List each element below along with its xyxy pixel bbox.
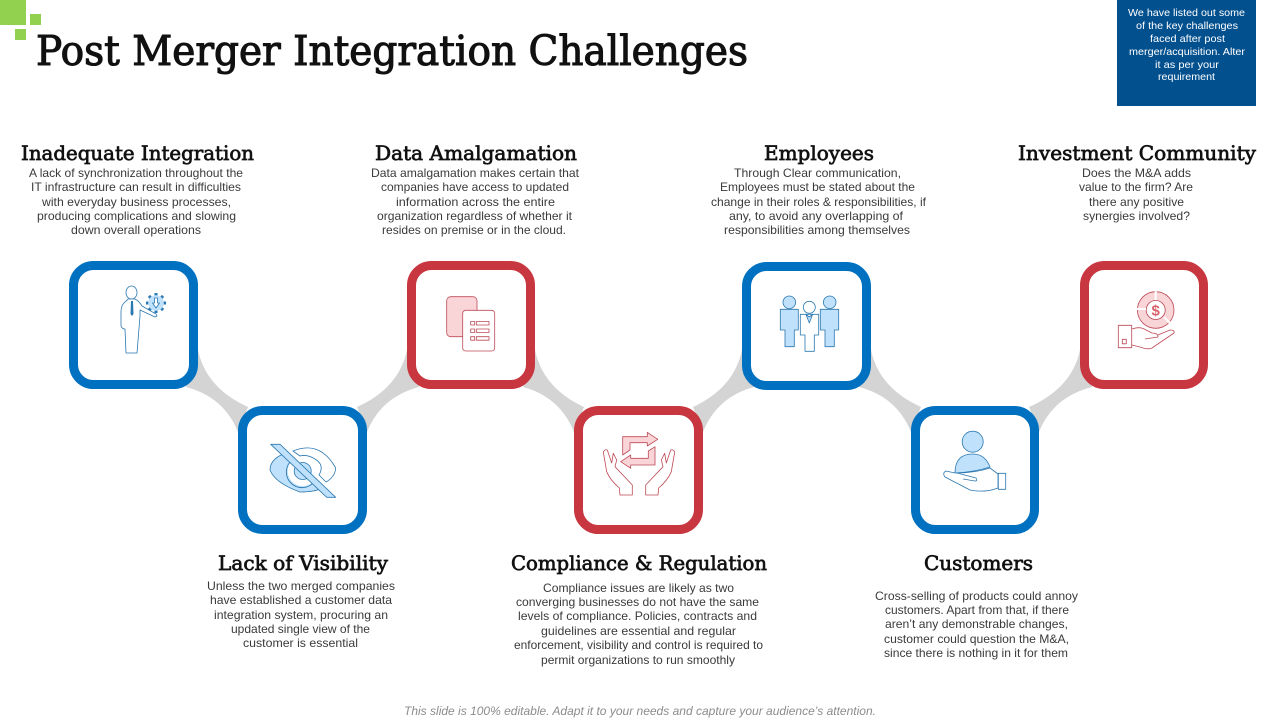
text block: investment community: Does the M&A adds	[1082, 166, 1191, 180]
text block: customers: aren’t any demonstrable changes,	[885, 617, 1068, 631]
panel: investment community	[1018, 141, 1257, 384]
icon: businessman with gear	[121, 286, 166, 353]
panel: customers	[875, 410, 1078, 660]
box: lack of visibility	[242, 410, 362, 530]
decorative corner squares	[0, 0, 41, 40]
text block: lack of visibility	[207, 579, 395, 650]
panel: inadequate integration	[21, 141, 254, 384]
heading: lack of visibility: Lack of Visibility	[218, 551, 389, 575]
icon: person on hand	[944, 431, 1006, 491]
text block: data amalgamation: information across the entire	[396, 195, 555, 209]
box: investment community	[1084, 266, 1204, 384]
text block: customers	[875, 589, 1078, 660]
note box: faced after post	[1150, 33, 1225, 45]
box: employees	[746, 266, 866, 386]
heading: customers: Customers	[924, 551, 1033, 575]
text block: compliance and regulation: converging businesses do not have the same	[516, 595, 759, 609]
text block: employees: responsibilities among themselves	[724, 223, 910, 237]
text block: inadequate integration: down overall operations	[71, 223, 201, 237]
box: compliance and regulation	[578, 410, 698, 530]
text block: compliance and regulation: permit organizations to run smoothly	[541, 653, 735, 667]
panel: compliance and regulation	[511, 410, 767, 667]
note box	[1117, 0, 1256, 106]
text block: inadequate integration: producing complications and slowing	[37, 209, 236, 223]
box: inadequate integration	[74, 266, 194, 384]
panel: lack of visibility	[207, 410, 395, 650]
text block: compliance and regulation: levels of compliance. Policies, contracts and	[518, 609, 757, 623]
text block: compliance and regulation: Compliance issues are likely as two	[543, 581, 734, 595]
note box: it as per your	[1155, 59, 1220, 71]
text block: employees	[711, 166, 927, 237]
heading: employees: Employees	[764, 141, 874, 165]
title: Post Merger Integration Challenges	[36, 27, 748, 75]
text block: lack of visibility: updated single view of the	[231, 622, 370, 636]
panel: employees	[711, 141, 927, 386]
text block: inadequate integration: IT infrastructure can result in difficulties	[31, 180, 241, 194]
text block: employees: Employees must be stated about the	[720, 180, 915, 194]
heading: inadequate integration: Inadequate Integration	[21, 141, 254, 165]
text block: lack of visibility: have established a customer data	[210, 593, 392, 607]
text block: investment community: synergies involved?	[1083, 209, 1190, 223]
text block: data amalgamation: resides on premise or in the cloud.	[382, 223, 566, 237]
text block: inadequate integration: with everyday business processes,	[41, 195, 231, 209]
text block: investment community	[1079, 166, 1193, 223]
icon: crossed-out eye	[270, 444, 336, 497]
footer note: This slide is 100% editable. Adapt it to your needs and capture your audience’s attention.	[404, 704, 876, 718]
text block: compliance and regulation: guidelines are essential and regular	[541, 624, 736, 638]
icon: documents	[447, 297, 495, 351]
heading: investment community: Investment Community	[1018, 141, 1257, 165]
text block: customers: customers. Apart from that, if there	[885, 603, 1069, 617]
icon: hands with cycle arrows	[603, 432, 675, 495]
text block: employees: Through Clear communication,	[734, 166, 901, 180]
text block: investment community: value to the firm? Are	[1079, 180, 1193, 194]
text block: inadequate integration	[29, 166, 243, 237]
grey connectors between boxes	[186, 350, 1092, 432]
text block: employees: change in their roles & responsibilities, if	[711, 195, 927, 209]
icon: hand holding dollar chart	[1118, 291, 1174, 349]
note box: requirement	[1158, 71, 1215, 83]
text block: investment community: there any positive	[1089, 195, 1184, 209]
icon: hand holding dollar chart: $	[1152, 302, 1161, 320]
note box: merger/acquisition. Alter	[1129, 46, 1246, 58]
box: customers	[916, 410, 1034, 530]
text block: data amalgamation: Data amalgamation makes certain that	[371, 166, 580, 180]
box: data amalgamation	[412, 266, 530, 384]
text block: data amalgamation	[371, 166, 580, 237]
text block: lack of visibility: Unless the two merged companies	[207, 579, 395, 593]
panel: data amalgamation	[371, 141, 580, 384]
heading: data amalgamation: Data Amalgamation	[375, 141, 577, 165]
text block: inadequate integration: A lack of synchronization throughout the	[29, 166, 243, 180]
icon: three people	[780, 296, 839, 351]
text block: data amalgamation: companies have access to updated	[381, 180, 569, 194]
text block: compliance and regulation	[514, 581, 763, 667]
text block: lack of visibility: integration system, procuring an	[214, 608, 388, 622]
text block: data amalgamation: organization regardless of whether it	[377, 209, 573, 223]
text block: employees: any, to avoid any overlapping of	[729, 209, 904, 223]
note box: of the key challenges	[1136, 20, 1238, 32]
text block: compliance and regulation: enforcement, visibility and control is required to	[514, 638, 763, 652]
text block: customers: Cross-selling of products could annoy	[875, 589, 1078, 603]
text block: lack of visibility: customer is essential	[243, 636, 358, 650]
text block: customers: since there is nothing in it for them	[884, 646, 1068, 660]
note box: We have listed out some	[1128, 7, 1245, 19]
text block: customers: customer could question the M&A,	[884, 632, 1069, 646]
heading: compliance and regulation: Compliance & Regulation	[511, 551, 767, 575]
